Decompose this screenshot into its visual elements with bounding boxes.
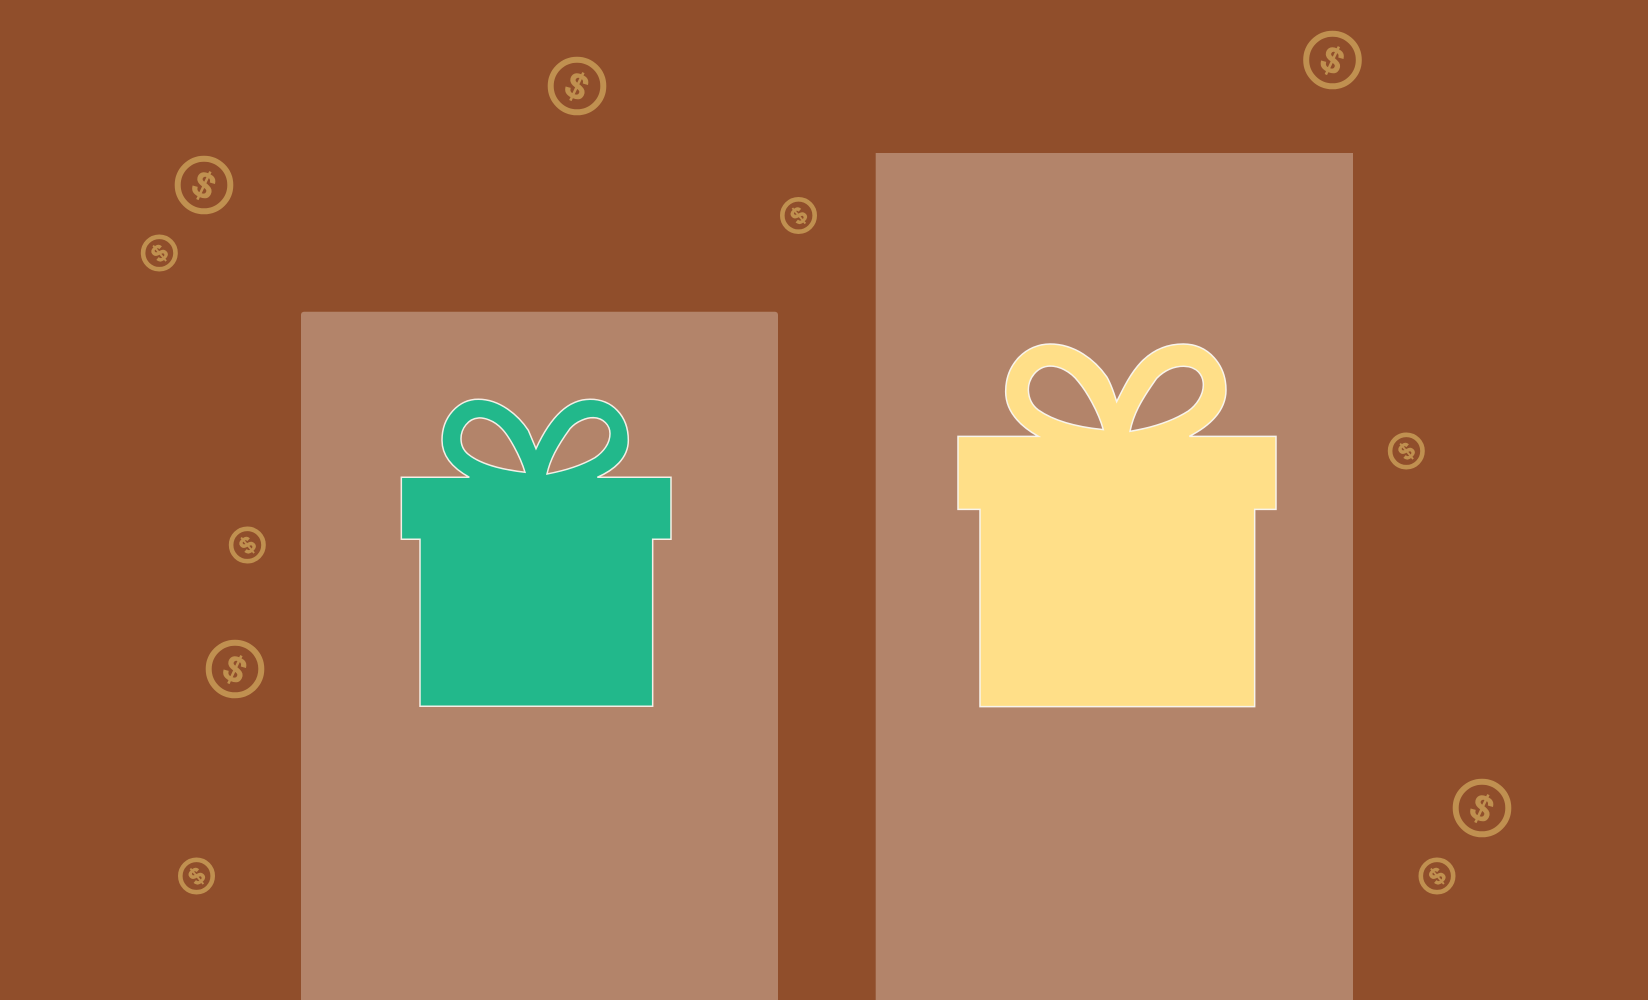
icon: small coin upper left: $ <box>146 239 174 268</box>
icon: small coin mid left: $ <box>234 531 262 560</box>
panel: left bar <box>301 312 778 1000</box>
icon: small coin top centre: $ <box>785 201 813 231</box>
icon: coin lower right <box>1456 782 1508 834</box>
icon: small coin bottom right: $ <box>1424 862 1452 891</box>
panel: right bar <box>876 153 1353 1000</box>
icon: coin upper left <box>178 159 230 211</box>
icon: coin upper left: $ <box>186 163 222 209</box>
icon: yellow gift box <box>958 344 1276 707</box>
icon: small coin mid right: $ <box>1393 437 1421 466</box>
icon: green gift box <box>401 399 671 706</box>
icon: coin top right <box>1306 34 1359 86</box>
icon: coin top centre <box>551 60 603 112</box>
icon: coin top centre: $ <box>559 64 595 110</box>
icon: coin lower left <box>209 643 261 695</box>
icon: small coin bottom left: $ <box>183 862 211 891</box>
icon: coin lower left: $ <box>217 647 253 693</box>
icon: coin top right: $ <box>1314 38 1351 84</box>
icon: coin lower right: $ <box>1464 786 1500 832</box>
